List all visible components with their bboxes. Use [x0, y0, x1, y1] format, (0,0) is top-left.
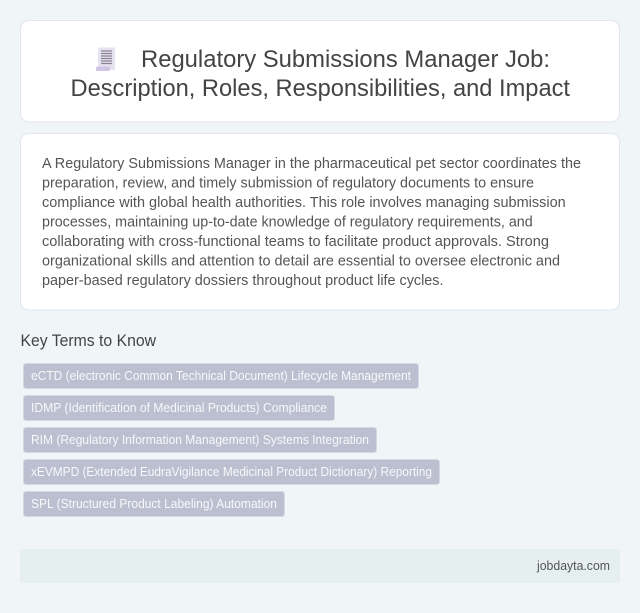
- tag: RIM: [24, 428, 376, 452]
- tag: IDMP: [24, 396, 334, 420]
- icon: receipt document: [96, 48, 115, 71]
- text block: job description: compliance with global health authorities. This role involves managing submission: [42, 195, 566, 211]
- text block: job description: [42, 156, 581, 289]
- tag: xEVMPD: [24, 460, 440, 484]
- text block: job description: paper-based regulatory dossiers throughout product life cycles.: [42, 273, 444, 289]
- heading: title: Regulatory Submissions Manager Job:: [141, 46, 550, 73]
- panel: title card: [20, 20, 620, 122]
- footer bar: jobdayta.com: [536, 559, 610, 573]
- heading: title: Description, Roles, Responsibilities, and Impact: [70, 75, 570, 102]
- tag: eCTD: eCTD (electronic Common Technical Document) Lifecycle Management: [31, 369, 411, 383]
- text block: job description: processes, maintaining up-to-date knowledge of regulatory requirements, and: [42, 214, 533, 230]
- tag: eCTD: [24, 364, 418, 388]
- tag: RIM: RIM (Regulatory Information Management) Systems Integration: [31, 433, 369, 447]
- text block: job description: organizational skills and attention to detail are essential to oversee electronic and: [42, 254, 560, 270]
- tag: SPL: SPL (Structured Product Labeling) Automation: [31, 497, 277, 511]
- tag: xEVMPD: xEVMPD (Extended EudraVigilance Medicinal Product Dictionary) Reporting: [31, 465, 432, 479]
- tag: IDMP: IDMP (Identification of Medicinal Products) Compliance: [31, 401, 327, 415]
- text block: job description: collaborating with cross-functional teams to facilitate product approvals. Strong: [42, 234, 549, 250]
- heading: key terms: Key Terms to Know: [20, 332, 156, 350]
- panel: description card: [20, 134, 620, 310]
- text block: job description: A Regulatory Submissions Manager in the pharmaceutical pet sector coordinates the: [42, 156, 581, 172]
- tag list: key terms: [24, 364, 440, 516]
- tag: SPL: [24, 492, 284, 516]
- footer bar: [20, 549, 620, 583]
- heading: title: [70, 46, 570, 102]
- text block: job description: preparation, review, and timely submission of regulatory documents to ensure: [42, 176, 534, 192]
